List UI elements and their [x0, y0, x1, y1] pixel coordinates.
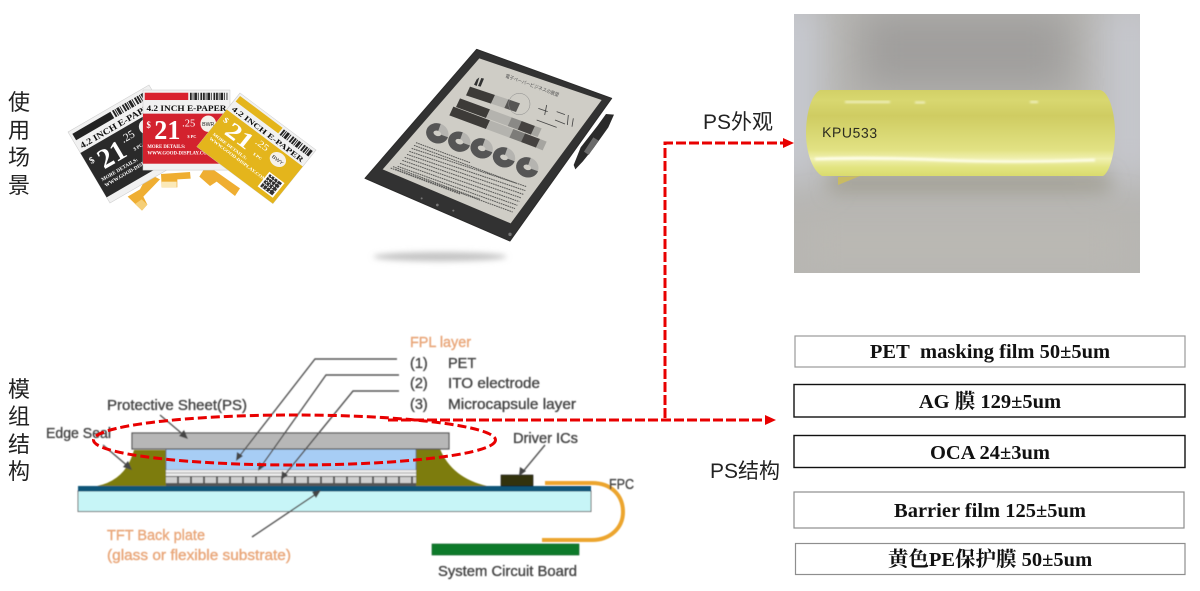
- price tag: red: WWW.GOOD-DISPLAY.COM: [147, 152, 212, 157]
- layer: PET masking film: PET masking film 50±5um: [870, 341, 1110, 363]
- heading: usage scenarios: 使: [8, 90, 30, 115]
- price tag: yellow: .25: [253, 137, 270, 154]
- layer: Barrier film: [794, 492, 1184, 528]
- price tag: yellow: BWY: [270, 154, 285, 167]
- price tag: black: [68, 85, 191, 203]
- bar chart on screen: [449, 77, 547, 150]
- roll highlights: [812, 102, 1112, 162]
- price tag: yellow: 21: [220, 117, 259, 155]
- price tag: red: 21: [154, 115, 180, 145]
- photo: PS film roll: [794, 14, 1140, 273]
- price tag: black: $: [87, 155, 97, 167]
- heading: usage scenarios: [8, 90, 30, 198]
- heading: module structure: [8, 377, 30, 484]
- arrow: to PS appearance: [665, 138, 794, 418]
- label: TFT back plate: (glass or flexible substrate): [107, 548, 291, 564]
- heading: module structure: 结: [8, 432, 30, 457]
- tablet body: [365, 49, 612, 241]
- layer: PET masking film: [795, 336, 1185, 367]
- protective sheet: [132, 433, 449, 449]
- label: Protective Sheet: Protective Sheet(PS): [107, 398, 247, 414]
- label: ITO electrode: [410, 376, 540, 392]
- layer: OCA: [794, 436, 1185, 468]
- leader arrowheads: [123, 430, 526, 498]
- handwritten roll label: KPU533: [822, 124, 877, 141]
- driver IC: [501, 475, 533, 486]
- price tag: yellow: $: [221, 115, 231, 126]
- structure stack: [794, 336, 1185, 574]
- price tag: yellow: [197, 93, 316, 204]
- price tag: red: BWR: [202, 122, 214, 128]
- layer: AG film: [794, 384, 1185, 417]
- label: Edge Seal: Edge Seal: [46, 426, 111, 442]
- heading: usage scenarios: 场: [8, 145, 30, 170]
- price tag: black: .25: [119, 128, 138, 146]
- tablet screen: [383, 58, 602, 223]
- price tag: red: [143, 90, 230, 170]
- label: Microcapsule layer: Microcapsule layer: [448, 397, 576, 413]
- label: Driver ICs: Driver ICs: [513, 431, 578, 447]
- price tag: red: .25: [182, 117, 195, 129]
- heading: module structure: 模: [8, 377, 30, 402]
- price tag: red: $ PC: [187, 134, 196, 139]
- price tag: yellow: 4.2 INCH E-PAPER: [230, 105, 306, 165]
- label: TFT back plate: TFT Back plate: [107, 528, 205, 544]
- edge seal: [97, 449, 487, 486]
- layer: yellow PE protective film: 黄色PE保护膜 50±5um: [888, 547, 1092, 571]
- label: PET: [410, 356, 476, 372]
- image: e-paper tablet: [365, 49, 614, 261]
- image: e-paper price tags: [68, 85, 316, 211]
- icon: stylus: [574, 114, 614, 169]
- price tag: black: WWW.GOOD-DISPLAY.COM: [104, 149, 167, 189]
- price tag: black: 21: [92, 135, 132, 175]
- heading: usage scenarios: 用: [8, 118, 30, 143]
- layer: AG film: AG 膜 129±5um: [919, 390, 1061, 413]
- TFT back plate: [78, 486, 591, 512]
- label: ITO electrode: ITO electrode: [448, 376, 540, 392]
- film flap: [838, 176, 860, 185]
- label: PS structure: PS结构: [710, 460, 780, 483]
- price tag: black: MORE DETAILS:: [101, 157, 139, 183]
- roll body: [806, 90, 1115, 176]
- photo background: [794, 14, 1140, 273]
- screen title: 電子ペーパービジネスの展望: [504, 73, 560, 99]
- heading: module structure: 构: [8, 459, 30, 484]
- layer: yellow PE protective film: [796, 544, 1185, 574]
- label: FPC: FPC: [609, 477, 634, 493]
- FPL layer stack: [166, 449, 416, 486]
- price tag: red: 4.2 INCH E-PAPER: [146, 103, 228, 113]
- price tag: black: 4.2 INCH E-PAPER: [78, 98, 158, 150]
- icon: flex cables: [128, 165, 240, 211]
- label: PS appearance: PS外观: [703, 111, 773, 134]
- heading: usage scenarios: 景: [8, 173, 30, 198]
- label: FPL layer: FPL layer: [410, 335, 471, 351]
- screen text paragraph: [391, 143, 527, 212]
- label: System Circuit Board: System Circuit Board: [438, 564, 577, 580]
- price tag: yellow: MORE DETAILS:: [211, 133, 248, 162]
- price tag: black: $ PC: [133, 143, 145, 153]
- donut charts on screen: [428, 125, 537, 176]
- price tag: yellow: WWW.GOOD-DISPLAY.COM: [208, 137, 267, 183]
- label: PET: PET: [448, 356, 476, 372]
- label: ITO electrode: (2): [410, 376, 428, 392]
- layer: Barrier film: Barrier film 125±5um: [894, 500, 1086, 522]
- price tag: red: $: [146, 120, 151, 130]
- heading: module structure: 组: [8, 404, 30, 429]
- callout: dashed red ellipse: [94, 415, 496, 465]
- system circuit board: [432, 544, 579, 555]
- label: PET: (1): [410, 356, 428, 372]
- FPC cable: [542, 483, 623, 540]
- tablet buttons: [421, 197, 512, 236]
- label: Microcapsule layer: (3): [410, 397, 428, 413]
- price tag: yellow: $ PC: [252, 152, 263, 161]
- price tag: red: MORE DETAILS:: [147, 145, 186, 150]
- layer: OCA: OCA 24±3um: [930, 442, 1050, 464]
- diagram: module cross-section: [46, 335, 634, 580]
- arrow: to PS structure: [388, 415, 776, 425]
- handwriting on screen: [537, 105, 573, 127]
- leader lines: [103, 359, 545, 537]
- tablet shadow: [373, 252, 507, 261]
- label: TFT back plate: [107, 528, 291, 564]
